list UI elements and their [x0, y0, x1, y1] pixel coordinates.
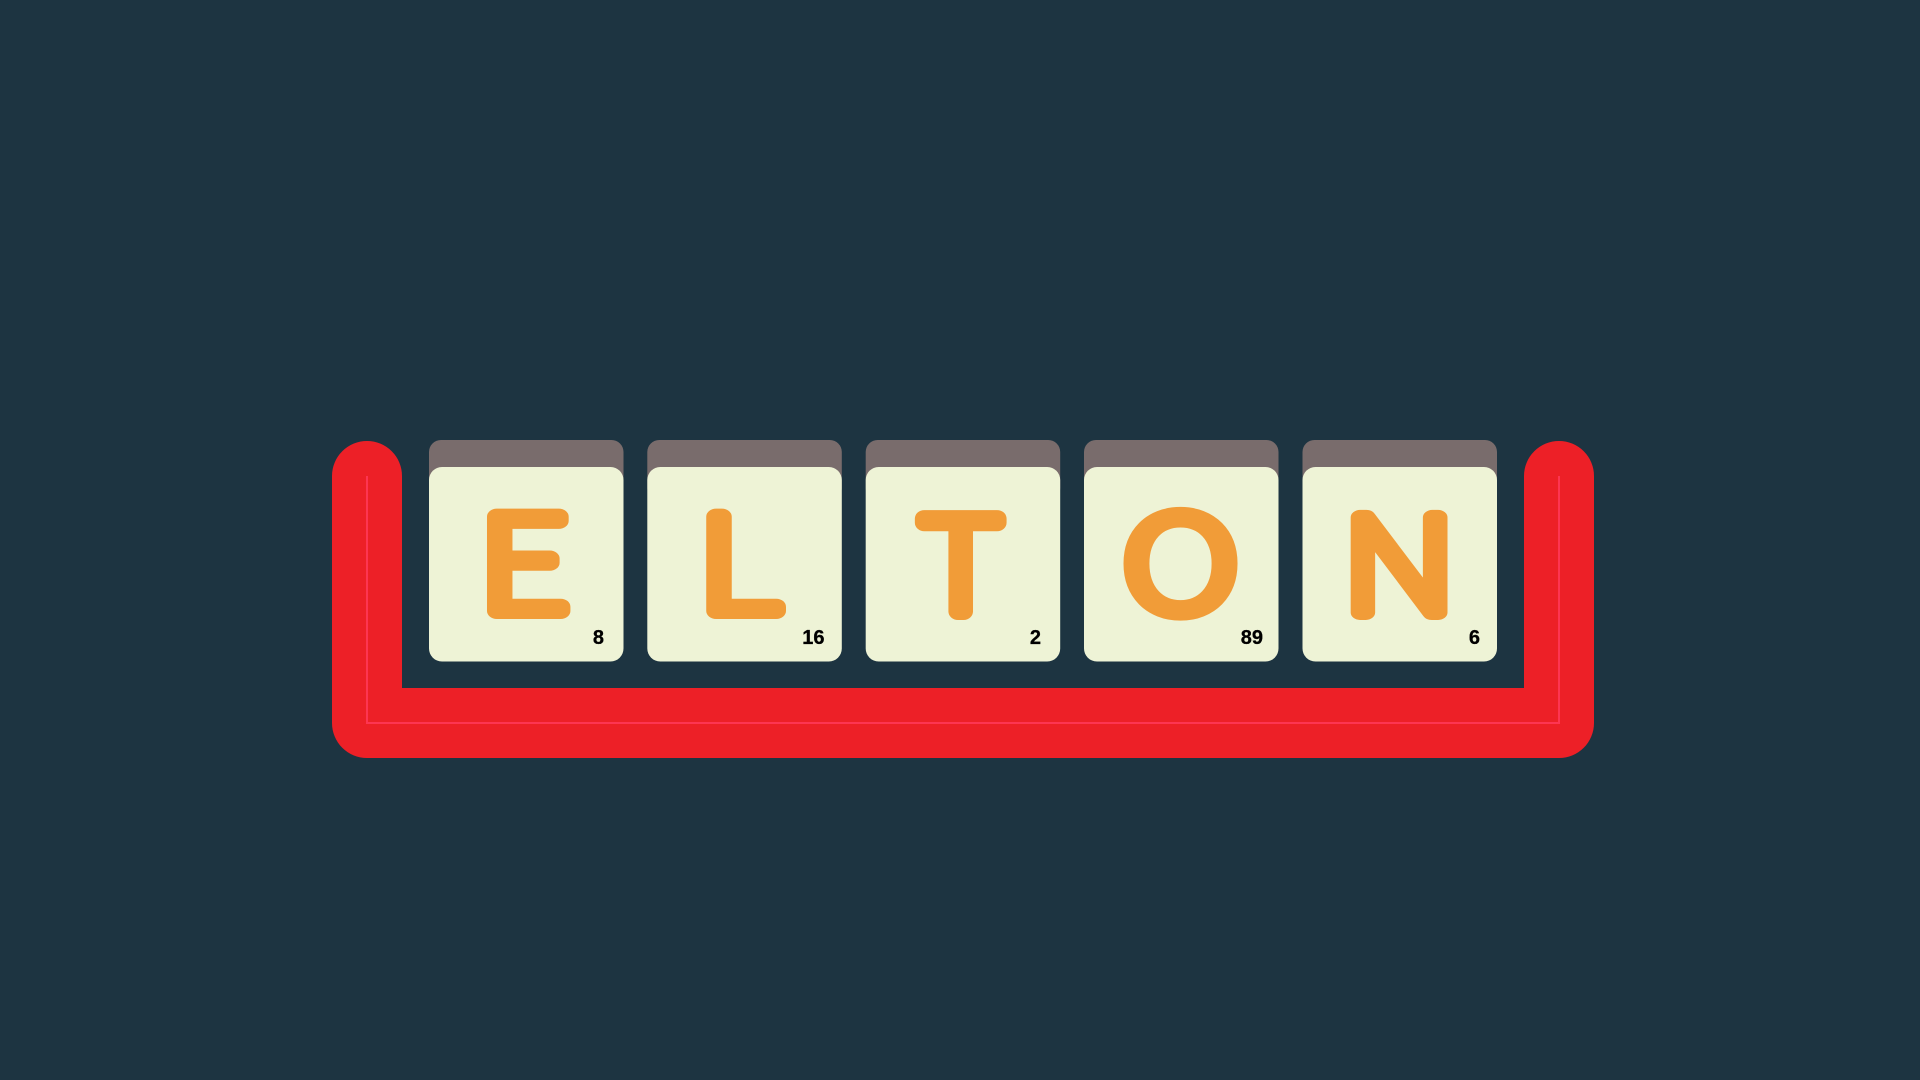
tile back	[1084, 440, 1278, 500]
letter T: T	[920, 464, 1002, 649]
tile: E	[429, 440, 624, 662]
tile back	[866, 440, 1060, 500]
value 2: 2	[1030, 627, 1041, 649]
tile face	[647, 467, 842, 662]
value 8: 8	[593, 627, 604, 649]
rack highlight line	[367, 476, 1559, 723]
tile: L	[647, 440, 842, 662]
tile face	[1084, 467, 1278, 662]
value 16: 16	[802, 627, 824, 649]
rack body	[367, 476, 1559, 723]
letter E: E	[479, 460, 569, 649]
value 89: 89	[1241, 627, 1263, 649]
red tile rack	[367, 476, 1559, 723]
tile back	[429, 440, 624, 500]
letter N: N	[1342, 461, 1456, 650]
tile back	[1302, 440, 1497, 500]
letter L: L	[698, 460, 780, 649]
letter O: O	[1123, 460, 1238, 648]
tile face	[1302, 467, 1497, 662]
tile: T	[866, 440, 1060, 662]
tile back	[647, 440, 842, 500]
tile: N	[1302, 440, 1497, 662]
value 6: 6	[1469, 627, 1480, 649]
tile face	[866, 467, 1060, 662]
tile face	[429, 467, 624, 662]
tile: O	[1084, 440, 1278, 662]
